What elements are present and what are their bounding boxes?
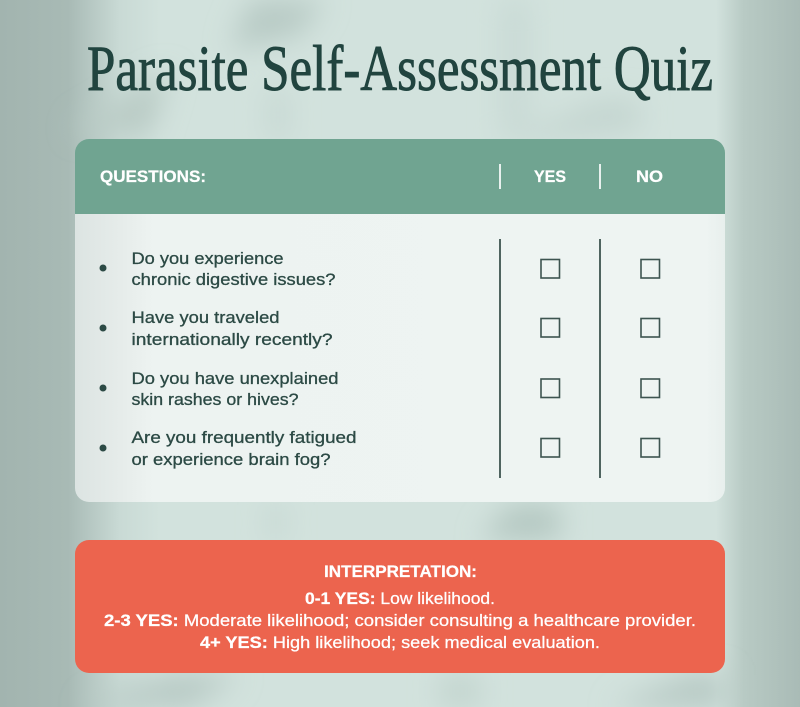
question 2 [100, 308, 332, 349]
question 1: chronic digestive issues? [132, 270, 336, 289]
question 4: or experience brain fog? [132, 450, 330, 469]
header: no: NO [636, 168, 663, 186]
table header bar [75, 139, 725, 214]
interpretation: 2-3 yes: 2-3 YES: Moderate likelihood; consider consulting a healthcare provider. [104, 612, 696, 630]
question 2: internationally recently? [132, 330, 332, 349]
question 2: Have you traveled [132, 308, 280, 327]
panel: questions table [75, 139, 725, 502]
header: yes: YES [534, 168, 566, 186]
table body [75, 214, 725, 502]
checkboxes: yes [541, 260, 560, 457]
question 3: Do you have unexplained [132, 369, 338, 388]
interpretation: 0-1 yes: 0-1 YES: Low likelihood. [305, 590, 495, 608]
question 1 [100, 249, 336, 289]
checkboxes: no [641, 260, 660, 457]
interpretation heading: INTERPRETATION: [324, 563, 477, 581]
question 3 [100, 369, 338, 409]
panel: interpretation [75, 540, 725, 673]
question 1: Do you experience [132, 249, 284, 268]
question 3: skin rashes or hives? [132, 390, 298, 409]
header: questions: QUESTIONS: [100, 168, 206, 186]
interpretation: 4+ yes: 4+ YES: High likelihood; seek medical evaluation. [200, 634, 600, 652]
question 4 [100, 428, 356, 469]
question 4: Are you frequently fatigued [132, 428, 356, 447]
